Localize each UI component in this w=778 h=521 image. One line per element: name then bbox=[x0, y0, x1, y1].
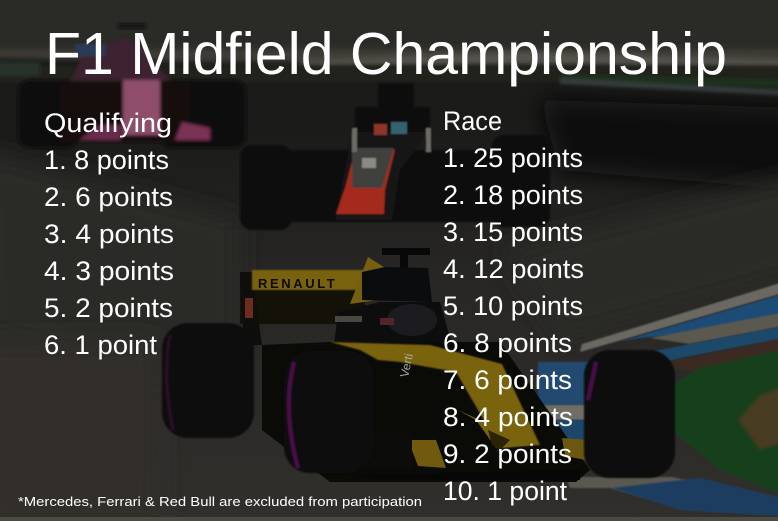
race list: 7. 6 points bbox=[443, 365, 572, 395]
chassis bbox=[262, 342, 590, 482]
race list: 10. 1 point bbox=[443, 476, 567, 506]
race points column bbox=[443, 106, 584, 506]
race list: 8. 4 points bbox=[443, 402, 573, 432]
race heading: Race bbox=[443, 106, 502, 136]
qualifying list: 2. 6 points bbox=[44, 182, 173, 212]
Renault car: Verti bbox=[397, 352, 416, 379]
qualifying list: 1. 8 points bbox=[44, 145, 169, 175]
rear wing bbox=[240, 276, 365, 324]
pink car (blurred, background) bbox=[18, 24, 246, 148]
Haas car bbox=[240, 83, 550, 230]
race list: 6. 8 points bbox=[443, 328, 572, 358]
qualifying list bbox=[44, 145, 174, 360]
race list: 1. 25 points bbox=[443, 143, 583, 173]
race list: 5. 10 points bbox=[443, 291, 583, 321]
qualifying heading: Qualifying bbox=[44, 108, 172, 138]
qualifying list: 3. 4 points bbox=[44, 219, 174, 249]
race car wheels bbox=[162, 323, 675, 478]
trackside curb: right bbox=[580, 280, 778, 352]
qualifying points column bbox=[44, 108, 174, 360]
race list bbox=[443, 143, 584, 506]
race list: 2. 18 points bbox=[443, 180, 583, 210]
Renault car: RENAULT bbox=[258, 276, 337, 291]
Renault car bbox=[240, 248, 590, 482]
race list: 4. 12 points bbox=[443, 254, 584, 284]
footnote: *Mercedes, Ferrari & Red Bull are excluded from participation bbox=[18, 494, 422, 509]
qualifying list: 4. 3 points bbox=[44, 256, 174, 286]
race list: 9. 2 points bbox=[443, 439, 572, 469]
qualifying list: 5. 2 points bbox=[44, 293, 173, 323]
title: F1 Midfield Championship bbox=[45, 21, 727, 87]
race list: 3. 15 points bbox=[443, 217, 583, 247]
qualifying list: 6. 1 point bbox=[44, 330, 157, 360]
